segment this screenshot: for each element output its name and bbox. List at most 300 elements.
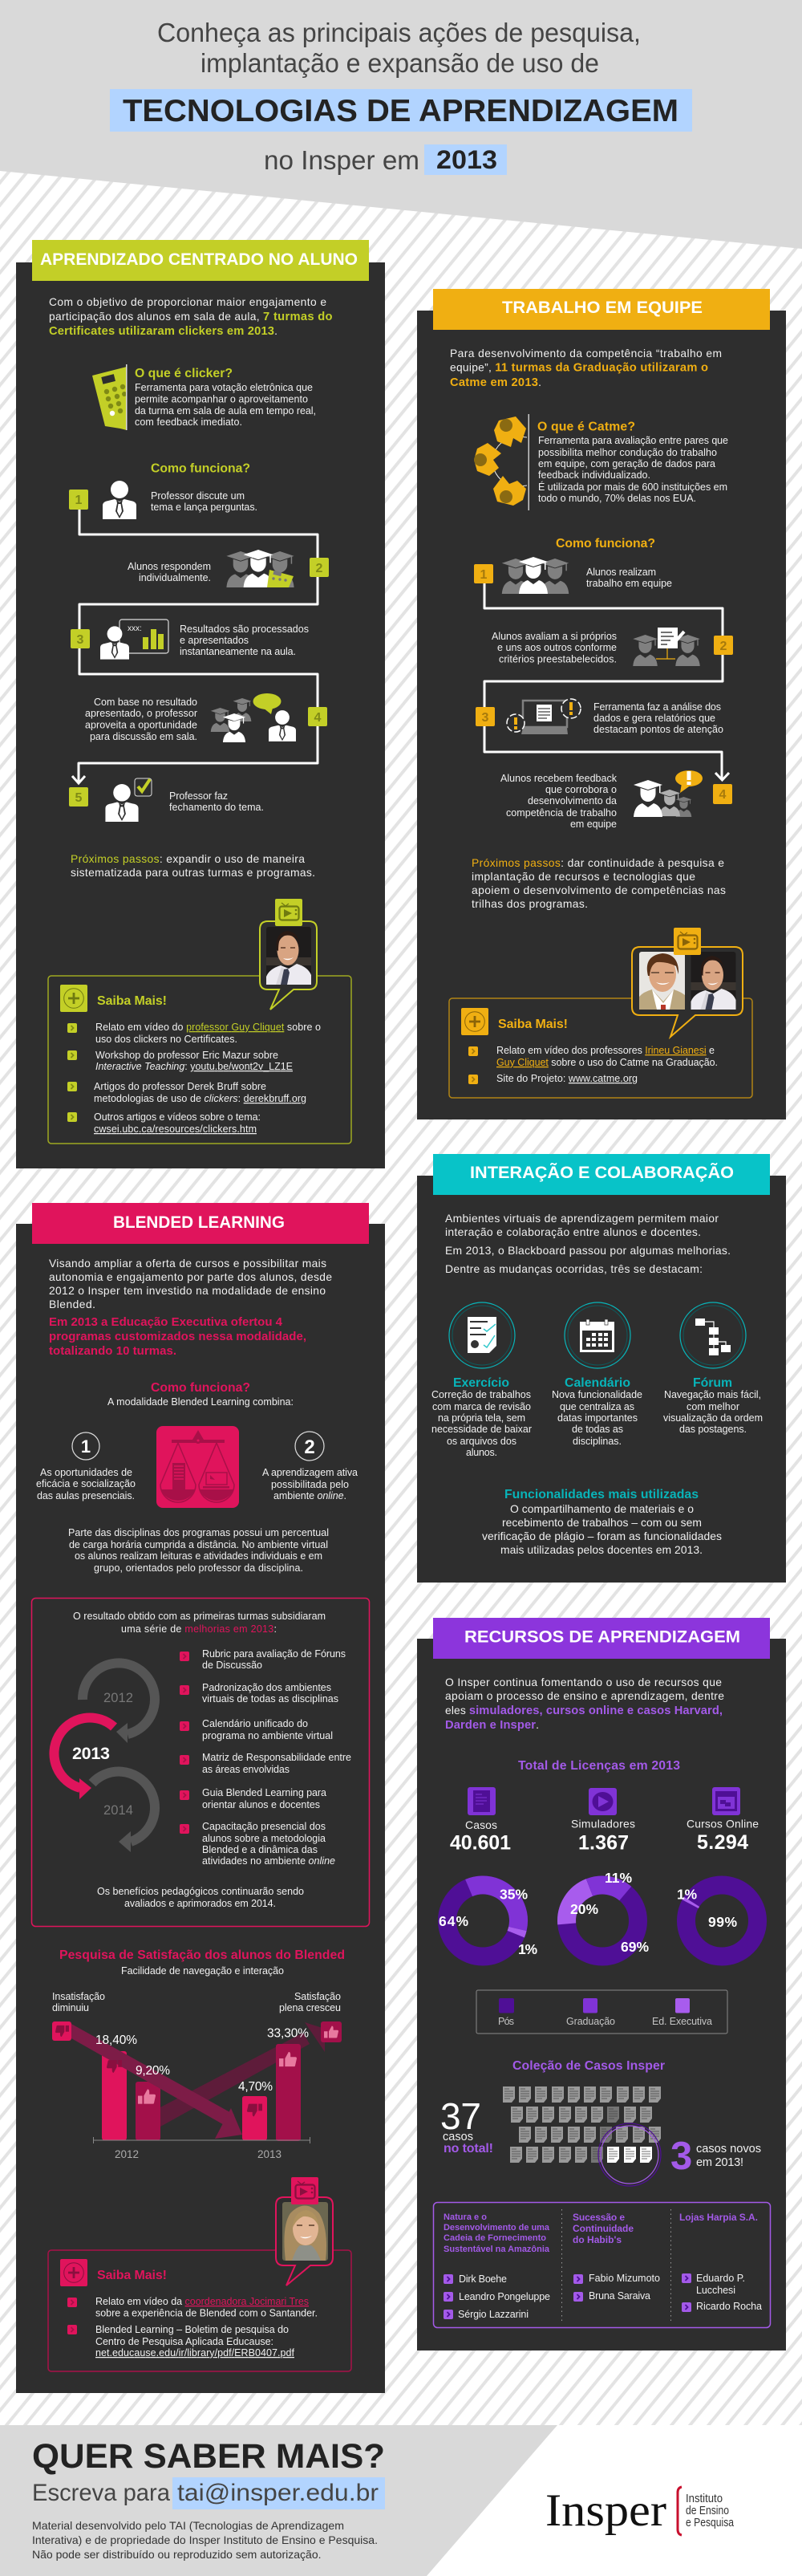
list of links [468,1045,718,1084]
step 3: instantaneamente na aula. [180,646,296,657]
donut chart: cursos online: 1% [677,1886,697,1902]
column: natura [444,2212,550,2320]
stat: 37 casos: no total! [444,2142,493,2155]
column: calendario [552,1302,642,1447]
text: o que e catme: O que é Catme? [537,421,635,433]
footer: contact: Interativa) e de propriedade do Insper Instituto de Ensino e Pesquisa. [32,2533,378,2546]
list of improvements: de Discussão [202,1660,262,1671]
step 4: apresentado, o professor [85,708,197,719]
icon: calendar [565,1302,630,1368]
panel: interacao e colaboracao [417,1154,786,1583]
intro text: Em 2013, o Blackboard passou por algumas melhorias. [445,1244,731,1257]
donut chart: casos: 1% [518,1941,537,1957]
column: exercicio: alunos. [466,1447,497,1458]
item 2: 2 [304,1436,315,1458]
list of links: Centro de Pesquisa Aplicada Educause: [95,2336,273,2347]
donut chart: casos: 64% [439,1913,468,1929]
stat: 3 casos novos [670,2135,761,2178]
list of links: Workshop do professor Eric Mazur sobre [95,1050,278,1061]
panel: aprendizado centrado no aluno [16,240,385,1168]
step 4: para discussão em sala. [90,731,197,742]
list of links: sobre a experiência de Blended com o Santander. [95,2308,318,2319]
intro text: Dentre as mudanças ocorridas, três se destacam: [445,1262,703,1275]
arrows: year cycle: 2012 [103,1690,133,1705]
step 4: Alunos recebem feedback [500,773,618,784]
list of links: uso dos clickers no Certificates. [95,1034,237,1045]
column: forum: das postagens. [679,1424,747,1435]
step 1: 1 [75,494,82,507]
list of links [67,1022,321,1135]
column: calendario: de todas as [572,1424,623,1435]
panel heading [32,240,369,281]
speech bubble with photo [276,2177,333,2285]
intro text: Certificates utilizaram clickers em 2013. [49,325,277,338]
text: o que e catme: em equipe, com geração de dados para [538,458,715,469]
column: calendario: datas importantes [557,1412,638,1424]
item 1: eficácia e socialização [36,1478,136,1489]
document grid: 37 cases [503,2086,661,2186]
intro text: Catme em 2013. [450,376,541,389]
icon: forum threads [680,1302,746,1368]
stat: 37 casos [440,2095,493,2155]
intro text: eles simuladores, cursos online e casos Harvard, [445,1704,723,1717]
text: o que e clicker: O que é clicker? [135,367,233,380]
item 1 [36,1432,136,1501]
text: proximos passos: implantação de recursos e tecnologias que [472,870,695,883]
intro text: autonomia e engajamento por parte dos alunos, desde [49,1271,332,1283]
list of improvements: virtuais de todas as disciplinas [202,1693,338,1704]
footer: contact: Escreva para [32,2480,170,2506]
step 4 [500,770,732,830]
list of links: Guy Cliquet sobre o uso do Catme na Graduação. [496,1057,718,1068]
list of links: Artigos do professor Derek Bruff sobre [94,1081,266,1092]
panel heading [433,1154,770,1195]
list of links: metodologias de uso de clickers: derekbruff.org [94,1093,306,1104]
text: o que e catme [537,421,728,504]
column: exercicio: os arquivos dos [447,1436,516,1447]
bar chart: satisfaction [52,1991,342,2160]
step 3: destacam pontos de atenção [593,724,723,735]
column: habibs: Continuidade [573,2223,634,2234]
text: proximos passos: sistematizada para outras turmas e programas. [71,866,315,879]
intro text [49,296,333,338]
heading: como funciona: Como funciona? [151,1381,250,1395]
step 1: 1 [480,568,488,582]
step 5: Professor faz [169,790,228,802]
item 2 [262,1432,358,1501]
bar chart: satisfaction: 4,70% [238,2080,273,2094]
legend [476,1990,727,2034]
footer: contact [0,2425,557,2576]
logo: Insper: de Ensino [686,2504,729,2517]
step 4: que corrobora o [545,784,617,795]
column: natura: Leandro Pongeluppe [459,2291,550,2302]
step 4: 4 [719,788,727,802]
item 1: das aulas presenciais. [37,1490,135,1501]
header: title block: 2013 [436,145,497,174]
column: calendario: Nova funcionalidade [552,1389,642,1400]
speech bubble with photo [260,899,317,1010]
text: proximos passos [472,856,726,910]
heading: pesquisa de satisfacao: Facilidade de navegação e interação [121,1965,284,1977]
text: o que e catme: É utilizada por mais de 600 instituições em [538,481,727,493]
list of links: Outros artigos e vídeos sobre o tema: [94,1111,261,1123]
list of links: Relato em vídeo da coordenadora Jocimari Tres [95,2296,309,2307]
arrow: dissatisfaction falls [71,2024,234,2127]
text: explanation: grupo, orientados pelo professor da disciplina. [94,1562,303,1574]
step 3: 3 [481,711,489,725]
column: exercicio: na própria tela, sem [438,1412,525,1424]
closing text: avaliados e aprimorados em 2014. [124,1898,276,1909]
text: proximos passos [71,852,315,879]
list of improvements: alunos sobre a metodologia [202,1833,326,1844]
text: funcionalidades mais utilizadas: mais utilizadas pelos docentes em 2013. [500,1543,703,1556]
list of improvements: Matriz de Responsabilidade entre [202,1752,351,1763]
item 1: 1 [81,1436,91,1457]
step 2: Alunos avaliam a si próprios [492,631,617,642]
text: proximos passos: Próximos passos: dar continuidade à pesquisa e [472,856,724,869]
step 2: e uns aos outros conforme [497,642,617,653]
intro text: Para desenvolvimento da competência “trabalho em [450,347,722,360]
closing text [97,1886,304,1909]
heading: colecao de casos: Coleção de Casos Insper [512,2059,665,2073]
text: funcionalidades mais utilizadas: O compartilhamento de materiais e o [510,1502,694,1515]
donut chart: simuladores: 20% [570,1901,598,1917]
text: o que e clicker: permite acompanhar o aproveitamento [135,393,308,404]
list of improvements: orientar alunos e docentes [202,1799,320,1810]
item 2: possibilitada pelo [271,1479,349,1490]
column: natura: Cadeia de Fornecimento [444,2233,546,2243]
text: proximos passos: trilhas dos programas. [472,897,588,910]
heading: como funciona: A modalidade Blended Learning combina: [107,1396,294,1408]
bar chart: satisfaction: Satisfação [294,1991,341,2002]
panel heading [433,1618,770,1659]
arrows: year cycle: 2014 [103,1802,133,1818]
logo: Insper: e Pesquisa [686,2516,735,2529]
intro text [445,1212,731,1275]
column: habibs: Bruna Saraiva [589,2290,650,2302]
step 4 [85,693,327,742]
list of improvements: as áreas envolvidas [202,1764,290,1775]
header: title block: Conheça as principais ações de pesquisa, [157,18,641,47]
header: title block: TECNOLOGIAS DE APRENDIZAGEM [123,94,678,128]
text: o que e clicker: Ferramenta para votação eletrônica que [135,382,313,393]
bar chart: satisfaction: 33,30% [267,2027,309,2041]
panel: saiba mais [449,928,752,1098]
list of links: cwsei.ubc.ca/resources/clickers.htm [94,1123,257,1135]
step 3: e apresentados [180,635,249,646]
text: o que e catme: possibilita melhor condução do trabalho [538,447,717,458]
step 2 [492,628,733,666]
step 4: competência de trabalho [506,807,617,819]
header: title block: implantação e expansão de uso de [200,48,599,78]
header: title block [110,18,692,175]
list of improvements [180,1648,351,1867]
bar chart: satisfaction: Insatisfação [52,1991,105,2002]
step 3 [476,699,723,735]
legend: Pós [498,2016,514,2027]
text: proximos passos: Próximos passos: expandir o uso de maneira [71,852,305,865]
donut chart: casos: 35% [500,1886,528,1902]
step 2: individualmente. [139,572,211,583]
flow path with arrow [484,583,729,780]
bar chart: satisfaction: 18,40% [95,2034,137,2047]
panel: blended learning [16,1203,385,2393]
column: forum: visualização da ordem [663,1412,763,1424]
stat: casos [450,1787,511,1854]
heading: saiba mais: Saiba Mais! [97,2269,167,2282]
text: funcionalidades mais utilizadas: Funcionalidades mais utilizadas [504,1488,699,1501]
intro text: Em 2013 a Educação Executiva ofertou 4 [49,1315,283,1329]
column: calendario: que centraliza as [560,1401,634,1412]
text: o que e clicker: com feedback imediato. [135,416,242,428]
column: natura: Sérgio Lazzarini [458,2309,529,2320]
donut chart: simuladores [557,1870,649,1967]
icon: catme team [474,414,529,510]
step 4: Com base no resultado [94,697,197,708]
list of improvements: Capacitação presencial dos [202,1821,326,1832]
text: o que e catme: feedback individualizado. [538,469,650,481]
panel heading: APRENDIZADO CENTRADO NO ALUNO [40,250,358,269]
list of links: Relato em vídeo do professor Guy Cliquet sobre o [95,1022,321,1033]
text: proximos passos: apoiem o desenvolvimento de competências nas [472,884,726,896]
legend: Graduação [566,2016,615,2027]
panel: recursos de aprendizagem [417,1618,786,2350]
stat: 37 casos: casos [443,2131,473,2143]
heading: saiba mais: Saiba Mais! [498,1018,568,1031]
bars [102,2044,301,2141]
column: calendario: disciplinas. [573,1436,622,1447]
text: o que e catme: todo o mundo, 70% delas nos EUA. [538,493,696,504]
stat: casos: Casos [465,1818,497,1831]
step 1 [69,481,257,519]
bar chart: satisfaction: 2013 [257,2148,282,2160]
legend: Ed. Executiva [652,2016,712,2027]
heading: saiba mais: Saiba Mais! [97,994,167,1008]
arrows: year cycle [54,1663,155,1852]
intro text: Darden e Insper. [445,1718,539,1732]
bar chart: satisfaction: 9,20% [136,2064,170,2078]
panel heading: TRABALHO EM EQUIPE [502,299,703,317]
list of links [67,2296,318,2359]
footer: contact: Não pode ser distribuído ou reproduzido sem autorização. [32,2548,321,2561]
step 1 [474,557,672,594]
panel: saiba mais [48,899,351,1144]
icon: clicker [92,364,127,430]
step 4: aproveita a oportunidade [85,719,197,730]
list of improvements: atividades no ambiente online [202,1855,335,1867]
column: forum: Fórum [693,1376,732,1390]
logo: Insper: Instituto [686,2492,723,2505]
text: explanation: de carga horária cumprida a distância. No ambiente virtual [69,1539,328,1550]
stat: simuladores [571,1788,635,1854]
header: title block: no Insper em [264,145,419,175]
column: natura: Desenvolvimento de uma [444,2223,550,2233]
arrow: satisfaction rises [157,2033,310,2127]
step 2: Alunos respondem [128,561,211,572]
list of improvements: Rubric para avaliação de Fóruns [202,1648,346,1660]
item 2: A aprendizagem ativa [262,1467,358,1478]
icon: document with checks [449,1302,515,1368]
intro text: Ambientes virtuais de aprendizagem permitem maior [445,1212,719,1225]
panel heading: BLENDED LEARNING [113,1213,285,1232]
step 1: trabalho em equipe [586,578,672,589]
heading: como funciona: Como funciona? [151,462,250,475]
text: explanation: Parte das disciplinas dos programas possui um percentual [68,1527,329,1538]
step 2: 2 [316,562,322,575]
heading: como funciona [107,1381,294,1408]
column: habibs [573,2212,660,2302]
text: funcionalidades mais utilizadas: verificação de plágio – foram as funcionalidades [482,1530,722,1542]
box: casos e autores [433,2202,770,2327]
intro text [49,1258,332,1358]
stat: 3 casos novos: em 2013! [696,2156,743,2169]
step 1: tema e lança perguntas. [151,502,257,513]
column: habibs: do Habib's [573,2234,622,2245]
step 3: dados e gera relatórios que [593,713,715,724]
step 4: 4 [314,711,321,725]
stat: casos: 40.601 [450,1831,511,1854]
list of links: Blended Learning – Boletim de pesquisa do [95,2324,289,2335]
column: habibs: Sucessão e [573,2212,625,2223]
donut chart: cursos online: 99% [708,1914,737,1930]
step 1: Professor discute um [151,490,245,502]
stat: 3 casos novos: casos novos [696,2143,761,2155]
step 3: xxx: [128,624,142,633]
step 3 [71,620,309,660]
speech bubble with photos [632,928,743,1037]
column: forum: com melhor [687,1401,739,1412]
intro text: Com o objetivo de proporcionar maior engajamento e [49,296,326,308]
step 3: Ferramenta faz a análise dos [593,701,721,713]
icon: plus [461,1008,488,1035]
intro text: Blended. [49,1298,95,1310]
step 5 [69,778,264,822]
intro text: Visando ampliar a oferta de cursos e possibilitar mais [49,1258,326,1270]
panel heading: RECURSOS DE APRENDIZAGEM [464,1627,740,1647]
column: habibs: Fabio Mizumoto [589,2273,660,2284]
footer: contact: tai@insper.edu.br [177,2480,379,2506]
stat: simuladores: 1.367 [578,1831,629,1854]
text: explanation: os alunos realizam leituras e atividades individuais e em [75,1550,322,1562]
intro text: equipe”, 11 turmas da Graduação utilizaram o [450,362,708,375]
column: exercicio: necessidade de baixar [431,1424,532,1435]
bar chart: satisfaction: diminuiu [52,2002,89,2013]
flow path with arrow [72,510,318,783]
step 2: 2 [720,640,727,653]
list of links: Site do Projeto: www.catme.org [496,1073,638,1084]
heading: pesquisa de satisfacao [59,1948,345,1977]
text: explanation [68,1527,329,1574]
step 5: fechamento do tema. [169,802,264,813]
stat: cursos online: Cursos Online [687,1817,759,1830]
footer: contact: QUER SABER MAIS? [32,2437,385,2476]
step 2: critérios preestabelecidos. [499,653,617,664]
column: lojas harpia: Lucchesi [696,2285,735,2296]
column: exercicio: com marca de revisão [432,1401,531,1412]
heading: como funciona: Como funciona? [556,537,655,551]
heading: total de licencas: Total de Licenças em 2013 [518,1759,680,1773]
donut chart: simuladores: 11% [605,1870,632,1886]
intro text [450,347,722,389]
panel heading [433,289,770,330]
column: lojas harpia: Eduardo P. [696,2273,745,2284]
icon: scale [156,1426,239,1508]
bar chart: satisfaction: 2012 [115,2148,139,2160]
column: lojas harpia: Lojas Harpia S.A. [679,2212,758,2223]
donut chart: simuladores: 69% [621,1939,649,1955]
intro text: programas customizados nessa modalidade, [49,1330,306,1343]
step 5: 5 [75,791,82,805]
column: natura: Sustentável na Amazônia [444,2245,550,2254]
donut chart: casos [436,1874,537,1968]
footer: contact: Material desenvolvido pelo TAI (Tecnologias de Aprendizagem [32,2519,344,2532]
item 1: As oportunidades de [40,1467,132,1478]
intro text: 2012 o Insper tem investido na modalidade de ensino [49,1285,326,1297]
column: calendario: Calendário [565,1376,630,1390]
list of improvements: Padronização dos ambientes [202,1682,331,1693]
column: natura: Dirk Boehe [459,2273,507,2285]
list of improvements: programa no ambiente virtual [202,1730,333,1741]
arrows: year cycle: 2013 [72,1744,110,1763]
list of improvements: Calendário unificado do [202,1718,308,1729]
intro text: apoiam o processo de ensino e aprendizagem, dentre [445,1689,724,1702]
icon: plus [60,2259,87,2286]
icon: plus [60,985,87,1012]
column: exercicio: Exercício [453,1376,509,1390]
item 2: ambiente online. [273,1490,346,1501]
step 4: em equipe [570,819,617,830]
step 2 [128,550,329,587]
closing text: Os benefícios pedagógicos continuarão sendo [97,1886,304,1897]
heading: pesquisa de satisfacao: Pesquisa de Satisfação dos alunos do Blended [59,1948,345,1962]
list of links: Relato em vídeo dos professores Irineu Gianesi e [496,1045,715,1056]
column: exercicio: Correção de trabalhos [431,1389,531,1400]
panel: saiba mais [48,2177,351,2371]
text: funcionalidades mais utilizadas [482,1488,722,1556]
step 1: Alunos realizam [586,567,656,578]
logo: Insper [545,2485,735,2536]
intro text: O Insper continua fomentando o uso de recursos que [445,1676,722,1688]
text: funcionalidades mais utilizadas: recebimento de trabalhos – com ou sem [502,1516,702,1529]
text: o que e clicker: da turma em sala de aula em tempo real, [135,405,316,416]
stat: simuladores: Simuladores [571,1817,635,1830]
step 3: 3 [77,633,83,647]
column: lojas harpia: Ricardo Rocha [696,2301,762,2312]
panel heading: INTERAÇÃO E COLABORAÇÃO [470,1164,734,1182]
stat: 3 casos novos: 3 [670,2135,692,2178]
intro text: interação e colaboração entre alunos e docentes. [445,1225,701,1238]
column: forum [663,1302,763,1435]
bar chart: satisfaction: plena cresceu [279,2002,341,2013]
intro text: totalizando 10 turmas. [49,1344,176,1358]
box: melhorias 2013 [32,1599,369,1926]
list of links: net.educause.edu/ir/library/pdf/ERB0407.pdf [95,2347,295,2359]
text: o que e clicker [135,367,316,428]
logo: Insper: Insper [545,2485,666,2536]
column: forum: Navegação mais fácil, [664,1389,761,1400]
list of improvements: Blended e a dinâmica das [202,1844,318,1855]
step 3: Resultados são processados [180,624,309,635]
intro text [445,1676,724,1732]
step 4: desenvolvimento da [528,795,617,807]
stat: 37 casos: 37 [440,2095,481,2137]
box heading: O resultado obtido com as primeiras turmas subsidiaram [73,1611,326,1622]
panel: trabalho em equipe [417,289,786,1119]
text: o que e catme: Ferramenta para avaliação entre pares que [538,435,728,446]
list of improvements: Guia Blended Learning para [202,1787,326,1798]
box heading [73,1611,326,1635]
